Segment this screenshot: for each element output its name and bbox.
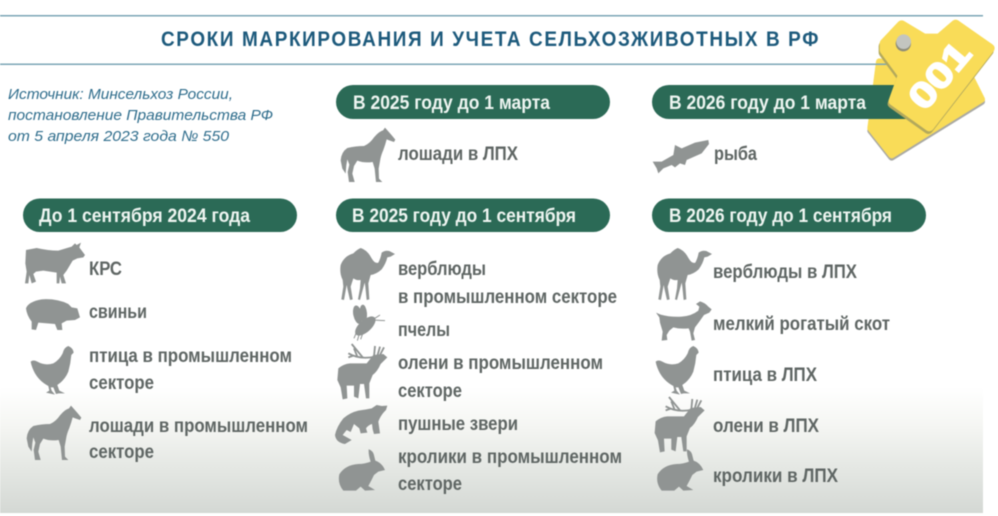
panel: until 1 September 2026 — [652, 198, 926, 491]
panel: until 1 March 2025 — [336, 85, 610, 182]
panel: until 1 September 2024 — [23, 198, 308, 463]
item: industrial poultry: птица в промышленном — [89, 346, 292, 367]
item: household poultry: птица в ЛПХ — [713, 365, 817, 386]
heading pill: В 2025 году до 1 сентября — [352, 206, 576, 227]
item: fish: рыба — [714, 144, 757, 165]
item: industrial deer: секторе — [398, 381, 462, 402]
item: industrial rabbits: секторе — [398, 474, 462, 495]
source note — [8, 86, 273, 145]
header rule top — [0, 15, 983, 16]
heading pill — [336, 85, 610, 119]
heading pill: До 1 сентября 2024 года — [39, 206, 250, 227]
item: industrial camels: в промышленном секторе — [398, 287, 617, 308]
heading pill: В 2025 году до 1 марта — [353, 93, 550, 114]
item: fur animals — [335, 405, 518, 444]
item: cattle: КРС — [89, 259, 122, 280]
item: industrial rabbits — [339, 447, 622, 495]
panel: until 1 September 2025 — [335, 198, 622, 495]
header rule bottom — [0, 64, 895, 65]
item: small ruminants: мелкий рогатый скот — [713, 314, 890, 335]
icon: front ear tag 001 — [883, 24, 990, 129]
item: industrial deer — [337, 344, 603, 402]
heading pill: В 2026 году до 1 марта — [669, 93, 866, 114]
heading pill — [652, 198, 926, 232]
item: fur animals: пушные звери — [398, 414, 518, 435]
title: СРОКИ МАРКИРОВАНИЯ И УЧЕТА СЕЛЬХОЗЖИВОТНЫХ В РФ — [161, 28, 820, 51]
item: industrial poultry: секторе — [89, 373, 154, 394]
heading pill — [652, 85, 926, 119]
item: household deer: олени в ЛПХ — [713, 416, 819, 437]
source note: от 5 апреля 2023 года № 550 — [8, 128, 230, 145]
item: household deer — [655, 397, 819, 452]
icon: front ear tag 001: 001 — [900, 33, 979, 117]
item: industrial horses: секторе — [89, 442, 154, 463]
item: cattle — [25, 243, 122, 283]
item: household camels — [657, 248, 857, 300]
source note: постановление Правительства РФ — [8, 107, 273, 124]
item: pigs: свиньи — [89, 302, 147, 323]
item: household horses: лошади в ЛПХ — [398, 144, 518, 165]
item: household rabbits — [657, 449, 838, 491]
panel: until 1 March 2026 — [652, 85, 926, 173]
item: industrial horses: лошади в промышленном — [89, 416, 308, 437]
heading pill — [23, 198, 297, 232]
item: household horses — [341, 128, 518, 182]
heading pill: В 2026 году до 1 сентября — [669, 206, 892, 227]
item: bees — [351, 304, 450, 341]
item: household camels: верблюды в ЛПХ — [713, 262, 857, 283]
item: pigs — [26, 299, 147, 330]
item: household poultry — [656, 346, 817, 395]
heading pill — [336, 198, 610, 232]
source note: Источник: Минсельхоз России, — [8, 86, 233, 103]
item: fish — [653, 140, 757, 173]
item: bees: пчелы — [398, 320, 450, 341]
bottom gradient band — [0, 388, 983, 513]
item: industrial camels — [340, 248, 617, 308]
item: industrial deer: олени в промышленном — [398, 353, 603, 374]
item: small ruminants — [656, 301, 890, 341]
item: industrial horses — [27, 406, 308, 463]
item: industrial camels: верблюды — [398, 259, 486, 280]
item: industrial poultry — [31, 346, 292, 395]
icon: back ear tag — [871, 62, 982, 157]
item: household rabbits: кролики в ЛПХ — [713, 466, 838, 487]
item: industrial rabbits: кролики в промышленном — [398, 447, 622, 468]
